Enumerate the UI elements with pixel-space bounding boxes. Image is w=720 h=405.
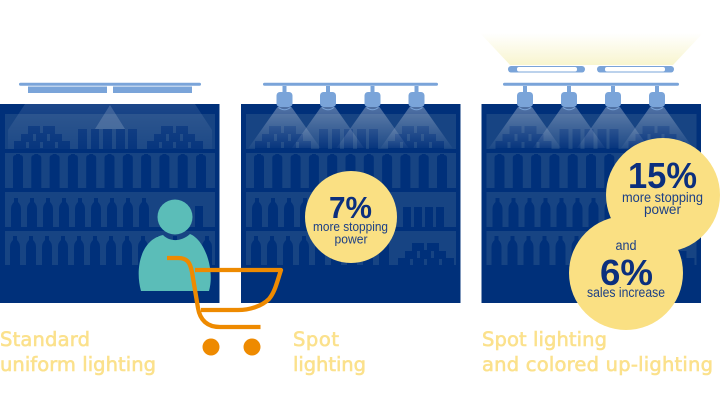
callout: 7 percent: more stopping (313, 220, 388, 234)
label: spot lighting and colored up-lighting: and colored up-lighting (482, 353, 713, 376)
up-light fixture right (597, 66, 674, 72)
icon: shopper (139, 200, 211, 291)
shelves with products (246, 114, 456, 266)
callout: 7 percent (305, 171, 397, 263)
shelf background (241, 104, 460, 303)
panel: standard uniform lighting (0, 83, 220, 303)
callout: 7 percent: power (334, 232, 368, 246)
light rail (263, 83, 438, 86)
shelf background (0, 104, 220, 303)
label: standard uniform lighting: Standard (0, 328, 90, 351)
bottles on bottom shelf (154, 236, 212, 265)
icon: shopping cart (167, 258, 281, 356)
light rail (503, 83, 679, 86)
label: spot lighting: lighting (293, 353, 366, 376)
callout: 15 percent: more stopping (622, 190, 703, 205)
callout: 7 percent: 7% (329, 190, 372, 225)
panel: spot lighting (241, 83, 460, 303)
light beams (248, 107, 452, 148)
label: spot lighting: Spot (293, 328, 339, 351)
up-light fixture left (508, 66, 585, 72)
callout: 15 percent: 15% (628, 155, 697, 196)
label: spot lighting and colored up-lighting: Spot lighting (482, 328, 607, 351)
light fixture left (28, 86, 107, 93)
box on shelf (195, 206, 203, 227)
light fixture right (113, 86, 192, 93)
callout: 6 percent: sales increase (587, 285, 665, 300)
spot lamps (276, 86, 424, 110)
label: standard uniform lighting: uniform lighting (0, 353, 156, 376)
spot lamps (517, 86, 665, 110)
callout: 6 percent: and (616, 238, 636, 253)
callout: 15 percent: power (644, 202, 681, 217)
shelf background (482, 104, 701, 303)
callout: 15 percent (606, 138, 720, 252)
panel: spot lighting and colored up-lighting (480, 33, 720, 330)
light beams (489, 107, 693, 148)
callout: 6 percent: 6% (600, 252, 653, 293)
up-light glow (480, 33, 703, 65)
light rail (19, 83, 201, 86)
uniform light wash (8, 104, 212, 149)
shelves with products (5, 114, 215, 265)
callout: 6 percent (569, 216, 683, 330)
shelves with products (486, 114, 696, 266)
